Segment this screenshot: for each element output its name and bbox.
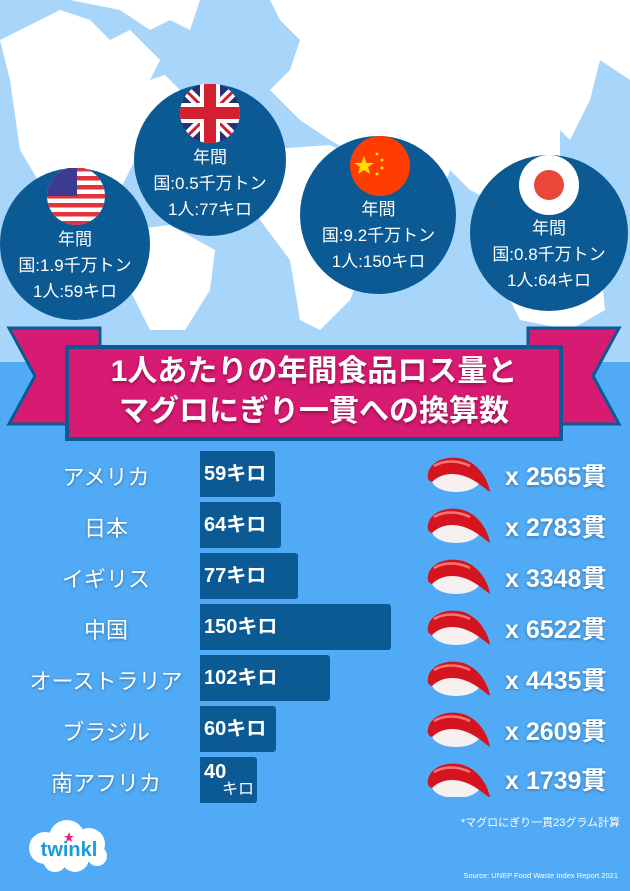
text: イギリス: [62, 567, 150, 592]
circle: China: 年間: [362, 200, 396, 219]
bar chart: 77キロ: [204, 565, 266, 587]
sushi icons: [428, 458, 490, 797]
text: x 3348貫: [505, 565, 606, 593]
bar chart: キロ: [222, 781, 254, 798]
text: x 4435貫: [505, 667, 606, 695]
circle: China: 1人:150キロ: [332, 252, 425, 271]
text: 中国: [84, 618, 128, 643]
bar chart: 60キロ: [204, 718, 266, 740]
text: オーストラリア: [30, 669, 182, 694]
circle: UK: 年間: [193, 148, 227, 167]
text: x 1739貫: [505, 767, 606, 795]
country labels: アメリカ: [63, 465, 149, 490]
text: x 2783貫: [505, 514, 606, 542]
bar chart: 150キロ: [204, 616, 277, 638]
bar chart: 40: [204, 761, 226, 783]
circle: Japan: 1人:64キロ: [507, 271, 591, 290]
circle: Japan: 国:0.8千万トン: [492, 245, 606, 264]
circle: UK: [134, 84, 286, 236]
circle: USA: [0, 168, 150, 320]
circle: Japan: 年間: [532, 219, 566, 238]
bar chart: 102キロ: [204, 667, 277, 689]
text: 南アフリカ: [51, 771, 161, 796]
circle: USA: 年間: [58, 230, 92, 249]
title banner: [6, 326, 622, 441]
map background: [0, 0, 630, 362]
bar chart: 59キロ: [204, 463, 266, 485]
title banner: マグロにぎり一貫への換算数: [119, 395, 509, 428]
text: ブラジル: [62, 720, 150, 745]
circle: UK: 1人:77キロ: [168, 200, 252, 219]
footnote: *マグロにぎり一貫23グラム計算: [461, 817, 620, 829]
sushi counts: x 2565貫: [505, 463, 606, 491]
text: x 2609貫: [505, 718, 606, 746]
circle: Japan: [470, 155, 628, 311]
text: x 6522貫: [505, 616, 606, 644]
circle: China: [300, 136, 456, 294]
source: Source: UNEP Food Waste Index Report 2021: [463, 871, 618, 880]
title banner: 1人あたりの年間食品ロス量と: [111, 355, 517, 388]
logo: twinkl: [29, 820, 107, 872]
bar chart: [200, 451, 391, 803]
bar chart: 64キロ: [204, 514, 266, 536]
circle: USA: 国:1.9千万トン: [18, 256, 132, 275]
circle: UK: 国:0.5千万トン: [153, 174, 267, 193]
circle: USA: 1人:59キロ: [33, 282, 117, 301]
text: 日本: [84, 516, 128, 541]
logo: twinkl: twinkl: [41, 839, 97, 861]
lower background: [0, 362, 630, 891]
circle: China: 国:9.2千万トン: [322, 226, 435, 245]
